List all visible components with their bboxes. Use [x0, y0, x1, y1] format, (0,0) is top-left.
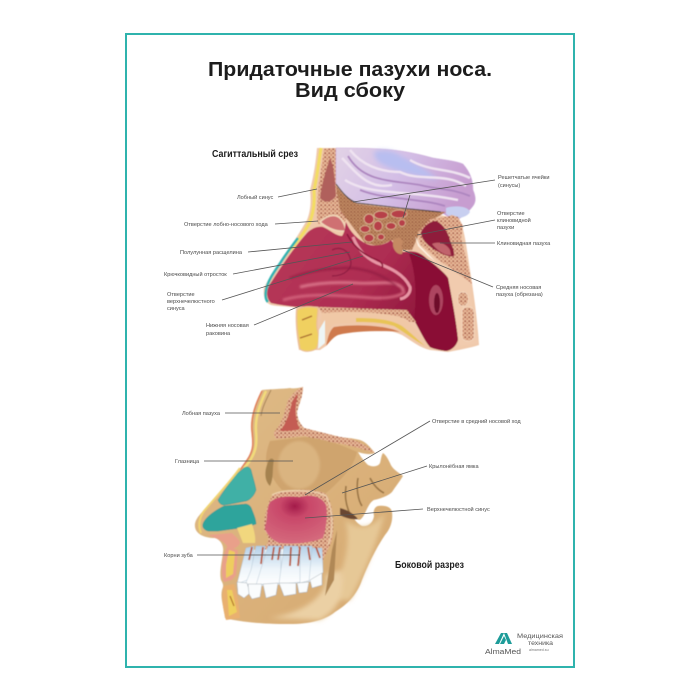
label: maxillary sinus opening: Отверстие	[167, 292, 195, 298]
palate soft tissue	[326, 325, 400, 346]
label: ethmoid cells	[353, 174, 549, 218]
label: sphenoid opening: клиновидной	[497, 217, 531, 224]
label: semilunar hiatus	[180, 242, 352, 256]
tooth roots	[249, 547, 320, 566]
label: maxillary sinus: Верхнечелюстной синус	[427, 506, 490, 513]
poster frame	[126, 34, 574, 667]
frontonasal duct	[320, 215, 345, 231]
label: pterygopalatine fossa	[342, 464, 479, 493]
label: sphenoid opening: Отверстие	[497, 211, 525, 217]
label: pterygopalatine fossa: Крылонёбная ямка	[429, 464, 479, 470]
label: sphenoid opening	[417, 211, 531, 235]
title: Придаточные пазухи носа.	[208, 58, 492, 81]
label: tooth roots: Корни зуба	[164, 553, 194, 559]
label: middle nasal concha: пазуха (обрезана)	[496, 292, 543, 298]
frontal sinus	[317, 148, 352, 224]
hard palate speckled band	[318, 307, 416, 322]
label: ethmoid cells: Решетчатые ячейки	[498, 174, 549, 181]
label: maxillary sinus	[305, 506, 490, 518]
maxillary sinus cavity	[265, 496, 327, 544]
main nasal cavity	[267, 222, 458, 351]
posterior septum bone	[416, 238, 478, 346]
label: opening to middle meatus: Отверстие в средний носовой ход	[432, 418, 521, 425]
maxillary sinus wall	[245, 490, 333, 566]
yellow subcutaneous band	[288, 148, 321, 252]
label: middle nasal concha	[403, 250, 543, 298]
label: orbit: Глазница	[175, 459, 200, 465]
frontal sinus cavity	[280, 394, 300, 431]
pterygoid shading	[345, 478, 384, 514]
skull and skin	[195, 387, 403, 624]
teal lateral cartilage	[266, 238, 298, 302]
lower teeth	[237, 573, 322, 599]
ethmoid cells	[360, 210, 407, 242]
sinus opening fold	[393, 238, 403, 254]
upper lip	[222, 547, 238, 582]
upper lip and gum	[297, 307, 319, 351]
orbit	[266, 437, 357, 493]
turbinates	[300, 282, 403, 292]
brain	[336, 148, 475, 219]
label: uncinate process	[164, 252, 350, 278]
upper teeth base	[238, 548, 323, 586]
label: uncinate process: Крючковидный отросток	[164, 271, 227, 278]
dark posterior choana	[409, 253, 458, 351]
pink nasal floor	[208, 533, 240, 549]
shading on the mandible	[325, 512, 385, 600]
label: sphenoid opening: пазухи	[497, 225, 514, 231]
frontal sinus wall	[274, 387, 375, 453]
label: maxillary sinus opening: синуса	[167, 306, 186, 312]
label: inferior nasal concha: Нижняя носовая	[206, 323, 249, 329]
heading: lateral section: Боковой разрез	[395, 560, 464, 571]
skin and outer tissue	[264, 148, 479, 352]
illustration: sagittal section	[264, 148, 479, 352]
upper teeth	[237, 546, 323, 585]
icon: logo mark	[495, 633, 512, 644]
label: sphenoid sinus: Клиновидная пазуха	[497, 241, 551, 247]
label: maxillary sinus opening: верхнечелюстного	[167, 299, 215, 305]
label: frontonasal duct opening	[184, 221, 318, 228]
label: opening to middle meatus	[305, 418, 521, 495]
logo: техника	[528, 640, 554, 647]
logo	[485, 633, 563, 656]
label: inferior nasal concha: раковина	[206, 331, 231, 337]
label: semilunar hiatus: Полулунная расщелина	[180, 250, 243, 256]
logo: AlmaMed	[485, 647, 521, 656]
label: orbit	[175, 459, 293, 465]
heading: sagittal section: Сагиттальный срез	[212, 149, 298, 160]
label: maxillary sinus opening	[167, 256, 363, 312]
forehead skin layers	[240, 391, 262, 470]
label: frontal sinus: Лобный синус	[237, 194, 274, 201]
nasal teal cartilages	[218, 467, 256, 505]
logo: almamed.su	[529, 648, 549, 652]
label: frontal sinus lateral	[182, 411, 280, 417]
logo: Медицинская	[517, 633, 563, 640]
label: inferior nasal concha	[206, 284, 353, 337]
label: tooth roots	[164, 553, 300, 559]
label: ethmoid cells: (синусы)	[498, 183, 520, 189]
sphenoid sinus cavity	[421, 221, 454, 256]
label: middle nasal concha: Средняя носовая	[496, 285, 541, 291]
label: sphenoid sinus	[440, 241, 551, 247]
title	[208, 58, 492, 102]
illustration: lateral section	[195, 387, 403, 624]
ethmoid bone	[336, 186, 446, 250]
title: Вид сбоку	[295, 79, 406, 102]
sphenoid sinus wall	[418, 215, 472, 284]
alar yellow cartilage	[237, 524, 255, 543]
label: frontonasal duct opening: Отверстие лобно-носового хода	[184, 222, 269, 228]
label: frontal sinus	[237, 189, 317, 201]
label: frontal sinus lateral: Лобная пазуха	[182, 411, 221, 417]
lower lip	[223, 584, 240, 620]
